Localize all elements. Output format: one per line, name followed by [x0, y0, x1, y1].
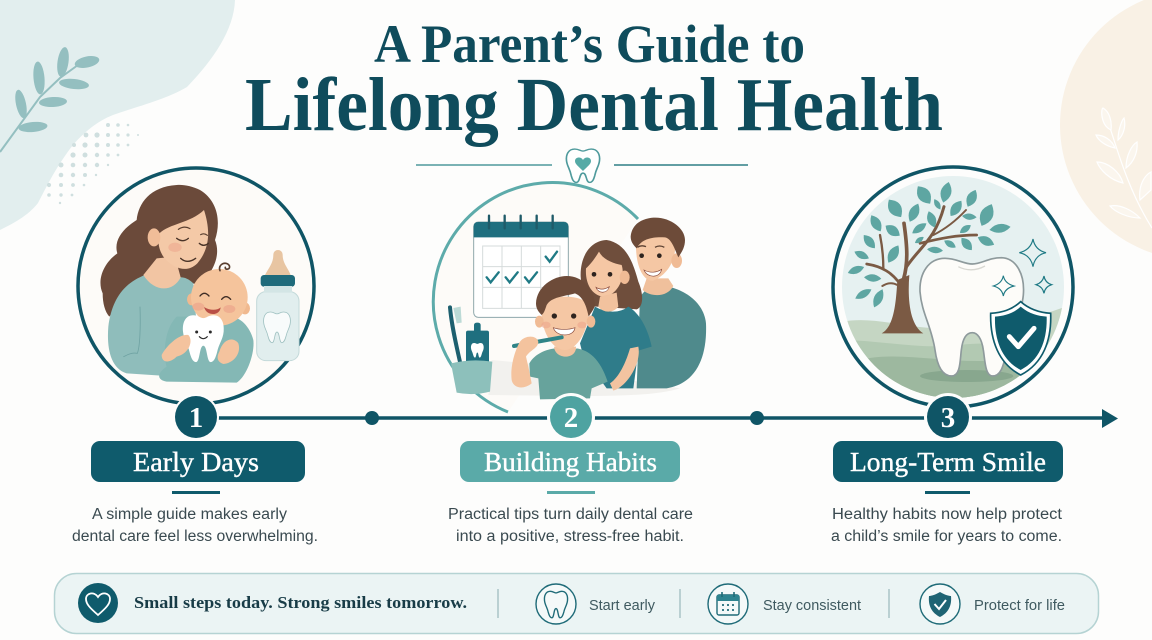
icon: large tooth	[920, 258, 1024, 382]
step number 3	[924, 393, 972, 441]
panel: long-term smile label: Long-Term Smile	[850, 447, 1046, 477]
text block: building habits description	[448, 506, 693, 545]
step number 1	[173, 394, 219, 440]
icon: shield with check	[991, 302, 1051, 375]
icon: calendar	[474, 216, 568, 317]
icon: father	[631, 218, 706, 388]
item: stay consistent	[708, 584, 861, 624]
icon: tree	[847, 181, 1011, 333]
top-right decorative circle with white sprig	[1060, 0, 1152, 260]
icon: heart badge	[78, 583, 118, 623]
panel: early days label	[91, 441, 305, 494]
item: start early	[536, 584, 656, 624]
text block: building habits description: Practical tips turn daily dental care	[448, 506, 693, 523]
text block: long-term smile description: a child’s smile for years to come.	[831, 528, 1062, 545]
icon: sparkles	[993, 239, 1052, 296]
item: start early: Start early	[589, 598, 656, 614]
panel: long-term smile label	[833, 441, 1063, 494]
panel: building habits label: Building Habits	[484, 447, 657, 477]
title divider with tooth heart icon	[416, 149, 748, 182]
text block: long-term smile description	[831, 506, 1063, 545]
text block: early days description: dental care feel less overwhelming.	[72, 528, 318, 545]
icon: mother	[580, 240, 652, 391]
panel: building habits illustration	[433, 183, 706, 412]
text block: building habits description: into a positive, stress-free habit.	[456, 528, 684, 545]
item: stay consistent: Stay consistent	[763, 598, 861, 614]
step number 1: 1	[189, 402, 203, 434]
panel: bottom tagline bar	[54, 574, 1098, 634]
panel: early days label: Early Days	[133, 447, 259, 477]
title line 1: A Parent’s Guide to	[374, 14, 805, 74]
text block: early days description	[72, 506, 318, 545]
panel: early days illustration	[78, 168, 314, 404]
item: protect for life: Protect for life	[974, 598, 1065, 614]
timeline arrow	[196, 409, 1118, 428]
text block: long-term smile description: Healthy habits now help protect	[832, 506, 1063, 523]
step number 2	[547, 393, 595, 441]
step number 2: 2	[564, 402, 578, 434]
icon: mother	[100, 185, 218, 376]
floor shadow	[488, 360, 680, 396]
panel: building habits label	[460, 441, 680, 494]
panel: long-term smile illustration	[833, 167, 1073, 410]
top-left decorative blob with sprig	[0, 0, 235, 230]
item: protect for life	[920, 584, 1065, 624]
icon: baby bottle	[257, 250, 299, 361]
tagline text: Small steps today. Strong smiles tomorrow.	[134, 593, 467, 612]
title line 2: Lifelong Dental Health	[245, 63, 943, 147]
step number 3: 3	[941, 402, 955, 434]
icon: toothbrush, toothpaste and cup	[450, 307, 492, 394]
icon: child brushing teeth	[511, 276, 608, 399]
icon: smiling tooth	[162, 315, 239, 364]
text block: early days description: A simple guide makes early	[92, 506, 287, 523]
title	[245, 14, 943, 147]
icon: baby	[159, 263, 254, 383]
